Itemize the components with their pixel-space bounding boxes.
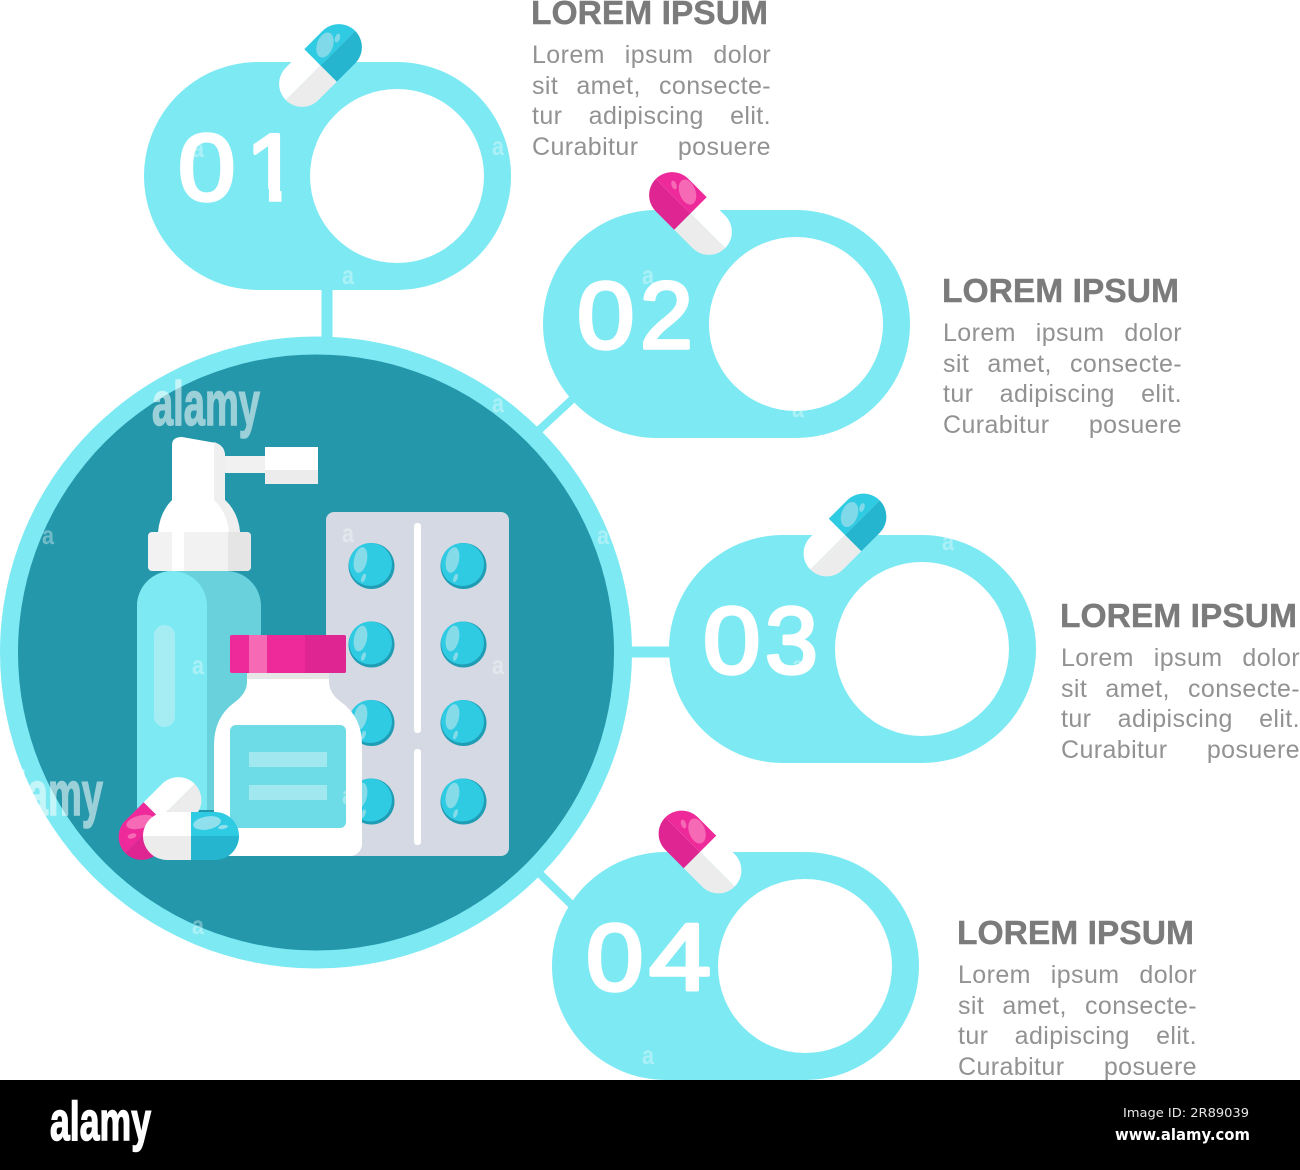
step 01 pill bbox=[144, 15, 511, 290]
text block 03: Curabitur posuere bbox=[1061, 736, 1300, 764]
text block 01: sit amet, consecte- bbox=[532, 72, 771, 100]
watermarks: a bbox=[342, 260, 354, 290]
watermarks: a bbox=[642, 260, 654, 290]
text block 04: Lorem ipsum dolor bbox=[958, 961, 1197, 989]
watermarks: a bbox=[492, 131, 504, 161]
watermarks: a bbox=[597, 520, 609, 550]
watermarks: a bbox=[342, 780, 354, 810]
watermarks: a bbox=[492, 650, 504, 680]
footer bar: Image ID: 2R89039 bbox=[1123, 1105, 1249, 1120]
watermarks: a bbox=[492, 388, 504, 418]
step 03 pill: 0 bbox=[703, 588, 760, 694]
step 03 pill: 3 bbox=[765, 588, 818, 694]
step 01 pill: 0 bbox=[178, 115, 236, 221]
text block 02: Lorem ipsum dolor bbox=[943, 319, 1182, 347]
watermarks: alamy bbox=[152, 370, 260, 439]
watermarks: a bbox=[192, 133, 204, 163]
connector lines bbox=[327, 285, 672, 911]
text block 01: Curabitur posuere bbox=[532, 133, 771, 161]
step 02 pill: 0 bbox=[577, 263, 634, 369]
text block 04: LOREM IPSUM bbox=[957, 915, 1194, 952]
watermarks: a bbox=[42, 520, 54, 550]
step 02 pill: 2 bbox=[640, 263, 693, 369]
step 04 pill bbox=[552, 801, 919, 1080]
text block 03: tur adipiscing elit. bbox=[1061, 705, 1300, 733]
text block 04: tur adipiscing elit. bbox=[958, 1022, 1197, 1050]
step 04 pill: 4 bbox=[649, 905, 711, 1011]
watermarks: a bbox=[942, 526, 954, 556]
illustration: spray bottle bbox=[137, 437, 318, 810]
step 01 pill: 1 bbox=[246, 115, 299, 221]
watermarks: alamy bbox=[0, 760, 103, 829]
text block 01 bbox=[531, 0, 771, 161]
illustration: capsules on the floor bbox=[109, 768, 239, 869]
watermarks: a bbox=[192, 910, 204, 940]
text block 01: Lorem ipsum dolor bbox=[532, 41, 771, 69]
step 02 pill bbox=[543, 163, 910, 438]
text block 03 bbox=[1060, 598, 1300, 764]
step 04 pill: 0 bbox=[586, 905, 644, 1011]
illustration: blister pack bbox=[326, 512, 509, 856]
footer bar: alamy bbox=[50, 1090, 151, 1152]
text block 04: Curabitur posuere bbox=[958, 1053, 1197, 1081]
text block 04: sit amet, consecte- bbox=[958, 992, 1197, 1020]
text block 03: LOREM IPSUM bbox=[1060, 598, 1297, 635]
text block 02: tur adipiscing elit. bbox=[943, 380, 1182, 408]
text block 02: LOREM IPSUM bbox=[942, 273, 1179, 310]
footer bar bbox=[0, 1080, 1300, 1170]
watermarks: a bbox=[342, 518, 354, 548]
text block 04 bbox=[957, 915, 1197, 1081]
watermarks: a bbox=[792, 393, 804, 423]
watermarks: a bbox=[792, 650, 804, 680]
watermarks: a bbox=[642, 1040, 654, 1070]
step 03 pill bbox=[669, 484, 1036, 763]
text block 01: tur adipiscing elit. bbox=[532, 102, 771, 130]
text block 03: Lorem ipsum dolor bbox=[1061, 644, 1300, 672]
footer bar: www.alamy.com bbox=[1115, 1125, 1250, 1144]
watermarks: a bbox=[192, 650, 204, 680]
watermarks bbox=[0, 131, 954, 1070]
central circle bbox=[0, 336, 632, 968]
text block 02: Curabitur posuere bbox=[943, 411, 1182, 439]
text block 03: sit amet, consecte- bbox=[1061, 675, 1300, 703]
illustration: jar bbox=[214, 635, 362, 856]
text block 02: sit amet, consecte- bbox=[943, 350, 1182, 378]
text block 02 bbox=[942, 273, 1182, 439]
